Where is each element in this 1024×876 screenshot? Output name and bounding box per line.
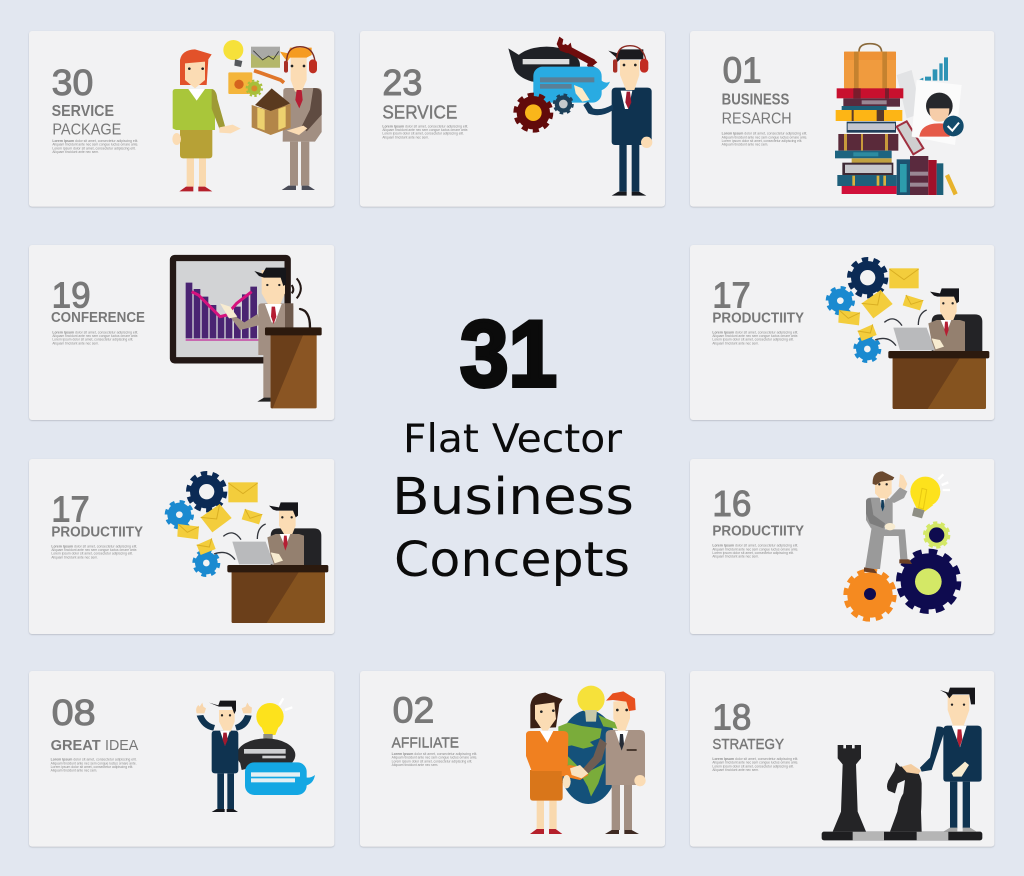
icon: navy gear (554, 95, 573, 113)
body text: Lorem Ipsum dolor sit amet, consectetur adipiscing elit. (52, 330, 138, 334)
body text: Lorem ipsum dolor sit amet, consectetur adipiscing elit. (382, 132, 464, 136)
number 16: 16 (712, 483, 751, 524)
number 01: 01 (723, 49, 762, 90)
body text (712, 757, 798, 772)
body text: Lorem ipsum dolor sit amet, consectetur adipiscing elit. (392, 759, 472, 763)
heading second word: IDEA (105, 738, 139, 754)
illustration: man with headset (574, 46, 652, 196)
title: Flat Vector: Flat Vector (403, 417, 623, 462)
illustration: man with raised arms (196, 701, 252, 812)
icon: light bulb (256, 698, 292, 741)
body text: Aliquam tincidunt ante nec sem congue luctus ornare ante. (52, 143, 138, 147)
icon: navy gear (899, 552, 958, 611)
illustration: woman in orange (526, 693, 588, 834)
icon: maroon wrench (557, 37, 597, 70)
illustration: upright books (897, 156, 958, 195)
icon: lime gear (924, 523, 949, 547)
body text: Lorem Ipsum dolor sit amet, consectetur adipiscing elit. (722, 132, 807, 136)
body text: Lorem Ipsum dolor sit amet, consectetur adipiscing elit. (51, 544, 137, 548)
presentation board with chart (173, 258, 288, 360)
body text (382, 124, 468, 139)
icon: chess knight (887, 762, 922, 832)
chess board (822, 832, 982, 840)
icon: navy gear (849, 259, 886, 296)
illustration: man with headset (280, 47, 322, 190)
body text (722, 132, 807, 147)
body text: Aliquam tincidunt ante nec sem congue luctus ornare ante. (382, 128, 468, 132)
title: 31: 31 (460, 301, 557, 406)
panel: 01 business research (690, 31, 994, 207)
icon: resume with portrait (912, 80, 964, 145)
heading: PACKAGE (52, 122, 121, 139)
panel: 16 productivity (690, 459, 994, 634)
title: Business: Business (392, 468, 634, 527)
body text (52, 330, 138, 345)
number 17: 17 (712, 274, 751, 315)
icon: microphone (300, 309, 310, 327)
heading: SERVICE (382, 101, 457, 122)
heading: GREAT (51, 738, 101, 754)
icon: maroon gear (515, 95, 551, 131)
body text: Aliquam tincidunt ante nec sem congue luctus ornare ante. (712, 761, 798, 765)
panel: 23 service (360, 31, 665, 207)
panel: 30 service package (29, 31, 334, 207)
icon: blue speech bubble (245, 762, 315, 795)
icon: navy gear (188, 473, 225, 510)
title: Concepts: Concepts (394, 532, 630, 588)
body text: Aliquam tincidunt ante nec sem. (51, 769, 97, 773)
icon: chart picture (251, 47, 280, 68)
heading (52, 103, 121, 139)
body text: Aliquam tincidunt ante nec sem congue luctus ornare ante. (712, 334, 798, 338)
connection arcs (875, 310, 927, 346)
number 18: 18 (712, 696, 751, 737)
number 08: 08 (52, 692, 96, 733)
number 02: 02 (393, 689, 434, 730)
body text: Lorem ipsum dolor sit amet, consectetur adipiscing elit. (712, 338, 794, 342)
icon: light bulb (223, 40, 243, 67)
body text: Aliquam tincidunt ante nec sem. (52, 341, 99, 345)
body text: Aliquam tincidunt ante nec sem congue luctus ornare ante. (722, 135, 807, 139)
icon: dark speech bubble (237, 738, 295, 772)
illustration: man in taupe suit (583, 691, 646, 834)
panel: 08 great idea (29, 671, 334, 847)
body text: Lorem Ipsum dolor sit amet, consectetur adipiscing elit. (712, 544, 798, 548)
icon: sound waves (292, 278, 301, 298)
icon: chess rook (833, 745, 866, 832)
heading: BUSINESS (722, 92, 790, 109)
body text: Lorem ipsum dolor sit amet, consectetur adipiscing elit. (52, 338, 133, 342)
icon: blue speech bubble (533, 67, 610, 103)
body text (52, 139, 138, 154)
body text: Lorem Ipsum dolor sit amet, consectetur adipiscing elit. (51, 758, 137, 762)
connection arcs (214, 524, 266, 560)
body text: Aliquam tincidunt ante nec sem congue luctus ornare ante. (392, 756, 477, 760)
body text: Aliquam tincidunt ante nec sem. (722, 143, 768, 147)
number 17: 17 (51, 488, 90, 529)
icon: blue gears (166, 502, 219, 575)
icon: tilted book (897, 121, 923, 154)
icon: globe (558, 710, 619, 804)
body text (51, 544, 137, 559)
illustration: presenter (220, 268, 293, 402)
number 23: 23 (382, 62, 422, 103)
body text: Aliquam tincidunt ante nec sem. (712, 768, 759, 772)
icon: folder and gear (228, 72, 262, 96)
icon: dark speech bubble (508, 47, 580, 83)
number 30: 30 (52, 62, 93, 103)
heading: PRODUCTIITY (51, 524, 143, 540)
office desk (888, 351, 989, 409)
heading: SERVICE (52, 103, 114, 120)
body text: Lorem Ipsum dolor sit amet, consectetur adipiscing elit. (712, 757, 798, 761)
icon: grey document (897, 70, 922, 118)
body text: Aliquam tincidunt ante nec sem congue luctus ornare ante. (51, 548, 137, 552)
body text: Lorem ipsum dolor sit amet, consectetur adipiscing elit. (51, 552, 133, 556)
body text: Lorem Ipsum dolor sit amet, consectetur adipiscing elit. (392, 752, 477, 756)
illustration: man at desk (893, 288, 982, 352)
icon: orange gear (846, 571, 894, 619)
body text: Aliquam tincidunt ante nec sem congue luctus ornare ante. (52, 334, 138, 338)
body text: Aliquam tincidunt ante nec sem. (382, 135, 429, 139)
heading: RESARCH (722, 110, 792, 127)
heading: PRODUCTIITY (712, 524, 804, 540)
body text: Lorem Ipsum dolor sit amet, consectetur adipiscing elit. (382, 124, 468, 128)
body text: Lorem Ipsum dolor sit amet, consectetur adipiscing elit. (712, 330, 798, 334)
panel: 18 strategy (690, 671, 994, 847)
body text: Aliquam tincidunt ante nec sem. (51, 555, 98, 559)
icon: package box (252, 88, 291, 135)
illustration: man with chess (902, 688, 982, 832)
illustration: woman (172, 49, 241, 191)
body text: Lorem Ipsum dolor sit amet, consectetur adipiscing elit. (52, 139, 138, 143)
body text: Lorem ipsum dolor sit amet, consectetur adipiscing elit. (52, 146, 136, 150)
panel: 02 affiliate (360, 671, 665, 847)
body text (392, 752, 477, 767)
body text (712, 544, 798, 559)
office desk (227, 565, 328, 623)
heading: AFFILIATE (392, 734, 459, 751)
body text (712, 330, 798, 345)
body text: Aliquam tincidunt ante nec sem. (712, 555, 759, 559)
illustration: man at desk (232, 502, 321, 566)
body text: Aliquam tincidunt ante nec sem. (712, 341, 759, 345)
podium (265, 327, 322, 408)
body text: Lorem ipsum dolor sit amet, consectetur adipiscing elit. (712, 551, 794, 555)
heading: CONFERENCE (51, 310, 145, 326)
panel: 19 conference (29, 245, 334, 420)
body text: Lorem ipsum dolor sit amet, consectetur adipiscing elit. (722, 139, 802, 143)
icons: flying envelopes (838, 268, 923, 341)
body text (51, 758, 137, 773)
illustration: stack of books (835, 88, 903, 194)
number 19: 19 (52, 274, 91, 315)
heading: PRODUCTIITY (712, 310, 804, 326)
heading: STRATEGY (712, 736, 784, 753)
body text: Lorem ipsum dolor sit amet, consectetur adipiscing elit. (51, 765, 133, 769)
panel: 17 productivity (left) (29, 459, 334, 634)
icon: blue gears (827, 288, 880, 361)
panel: 17 productivity (right) (690, 245, 994, 420)
body text: Aliquam tincidunt ante nec sem congue luctus ornare ante. (51, 761, 137, 765)
body text: Aliquam tincidunt ante nec sem congue luctus ornare ante. (712, 547, 798, 551)
body text: Lorem ipsum dolor sit amet, consectetur adipiscing elit. (712, 764, 794, 768)
icon: light bulb (577, 686, 605, 722)
icons: flying envelopes (177, 482, 262, 555)
icon: briefcase (844, 44, 896, 89)
heading (722, 92, 792, 127)
body text: Aliquam tincidunt ante nec sem. (52, 150, 99, 154)
icon: wrench (254, 71, 284, 83)
body text: Aliquam tincidunt ante nec sem. (392, 763, 438, 767)
icon: light bulb (910, 474, 950, 518)
illustration: man climbing gears (864, 471, 912, 573)
icon: bar chart (919, 57, 948, 81)
